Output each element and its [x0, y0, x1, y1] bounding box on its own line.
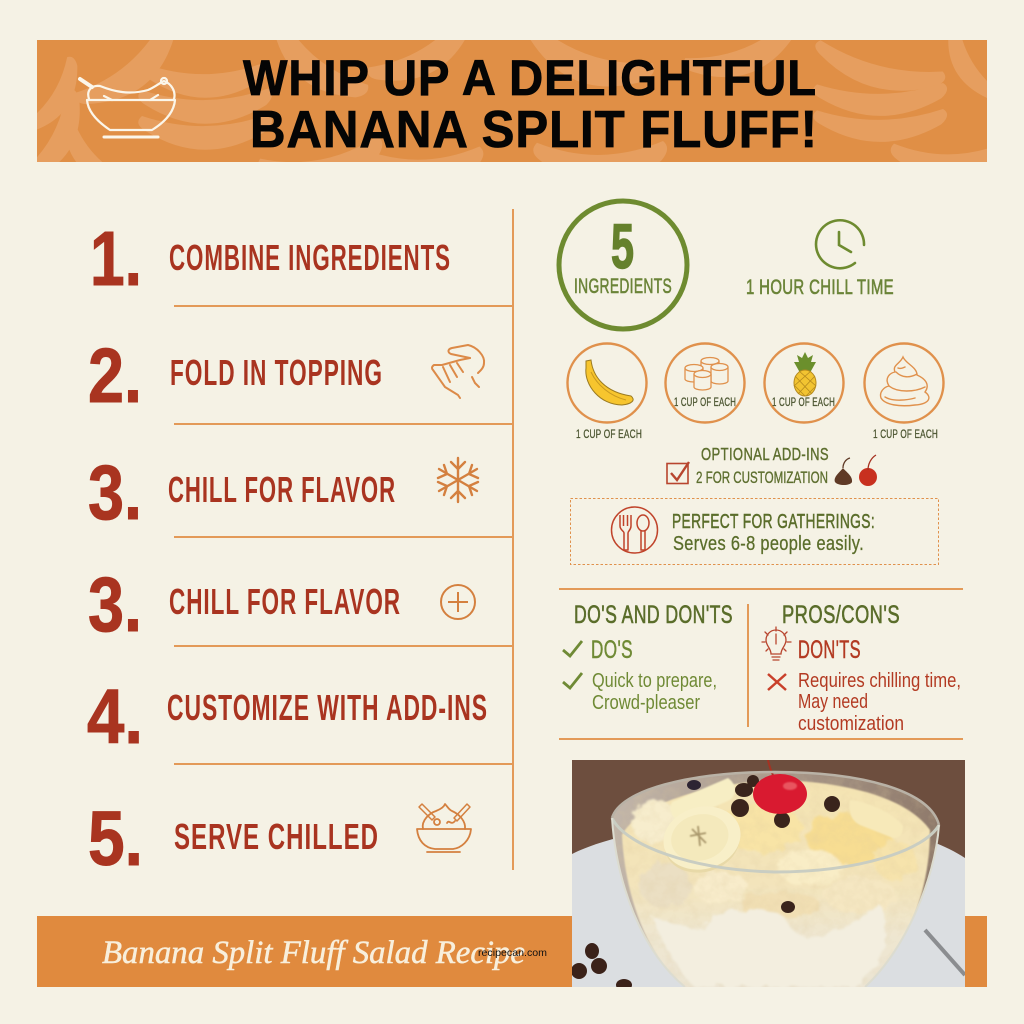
ingredient: whipped cream: [864, 344, 944, 441]
step 5: [88, 796, 471, 882]
step 4: [87, 674, 513, 765]
do's and don'ts panel: [559, 588, 963, 740]
icon: cherry: [859, 455, 877, 486]
step 1: [90, 216, 513, 307]
step 3 repeat: 3.: [88, 562, 142, 648]
icon: plus: [441, 585, 475, 619]
step 1: COMBINE INGREDIENTS: [169, 237, 451, 278]
icon: hand: [432, 345, 484, 398]
footer banner: [37, 916, 987, 987]
step 4: 4.: [87, 674, 143, 760]
header banner: [37, 40, 987, 162]
step 2: [88, 333, 513, 425]
title: [243, 50, 818, 159]
bowl: [613, 773, 938, 949]
don'ts column: [762, 627, 961, 735]
step 3: 3.: [88, 450, 142, 536]
icon: bowl: [80, 78, 175, 137]
don'ts column: Requires chilling time,: [798, 670, 961, 692]
title: WHIP UP A DELIGHTFUL: [243, 50, 817, 106]
icon: checkbox: [667, 462, 689, 484]
stat: chill time: [746, 220, 894, 299]
ingredient: banana: 1 CUP OF EACH: [576, 427, 642, 441]
footer banner: Banana Split Fluff Salad Recipe: [102, 935, 525, 971]
icon: chocolate chip: [835, 458, 852, 485]
do's column: Crowd-pleaser: [592, 692, 700, 714]
step 4: CUSTOMIZE WITH ADD-INS: [167, 687, 488, 728]
step 5: SERVE CHILLED: [174, 816, 379, 857]
step 5: 5.: [88, 796, 143, 882]
step 2: FOLD IN TOPPING: [170, 352, 383, 393]
gatherings callout: [570, 498, 938, 564]
vertical divider: [512, 209, 514, 870]
chocolate chips on plate: [571, 943, 632, 991]
stat: 5 ingredients: [559, 201, 687, 329]
photo: banana split fluff in glass bowl: [571, 760, 965, 991]
heading: pros/cons: PROS/CON'S: [782, 601, 900, 629]
stat: 5 ingredients: 5: [611, 212, 634, 282]
do's column: Quick to prepare,: [592, 670, 717, 692]
icon: snowflake: [438, 458, 478, 502]
step 3 repeat: [88, 562, 513, 648]
ingredient: banana: [568, 344, 646, 441]
do's column: [563, 636, 717, 714]
step 1: 1.: [90, 216, 142, 302]
optional add-ins: 2 FOR CUSTOMIZATION: [696, 468, 828, 487]
gatherings callout: PERFECT FOR GATHERINGS:: [672, 511, 875, 533]
ingredient: whipped cream: 1 CUP OF EACH: [873, 427, 938, 441]
do's column: DO'S: [591, 636, 633, 664]
optional add-ins: [667, 444, 877, 487]
optional add-ins: OPTIONAL ADD-INS: [701, 444, 829, 464]
stat: 5 ingredients: INGREDIENTS: [574, 275, 672, 298]
gatherings callout: Serves 6-8 people easily.: [673, 533, 864, 555]
icon: fork and spoon: [612, 507, 658, 553]
stat: chill time: 1 HOUR CHILL TIME: [746, 276, 894, 299]
chocolate chips: [687, 775, 840, 913]
bowl rim: [612, 772, 939, 987]
ingredient: marshmallows: [666, 344, 744, 422]
ingredient: marshmallows: 1 CUP OF EACH: [674, 395, 736, 409]
step 3: [88, 450, 513, 538]
don'ts column: DON'TS: [798, 636, 861, 664]
title: BANANA SPLIT FLUFF!: [250, 101, 818, 159]
step 3 repeat: CHILL FOR FLAVOR: [169, 581, 401, 622]
banana slices: [664, 778, 902, 872]
ingredient: pineapple: [764, 344, 844, 422]
heading: do's and don'ts: DO'S AND DON'TS: [574, 601, 733, 629]
icon: light bulb: [762, 627, 791, 660]
ingredient: pineapple: 1 CUP OF EACH: [772, 395, 835, 409]
icon: clock: [816, 220, 864, 268]
icon: serving bowl: [417, 804, 471, 852]
don'ts column: customization: [798, 713, 904, 735]
cherry: [753, 760, 807, 814]
don'ts column: May need: [798, 691, 868, 713]
watermark: recipecan.com: [478, 947, 547, 959]
step 3: CHILL FOR FLAVOR: [168, 469, 396, 510]
step 2: 2.: [88, 333, 142, 419]
spoon: [925, 930, 965, 975]
